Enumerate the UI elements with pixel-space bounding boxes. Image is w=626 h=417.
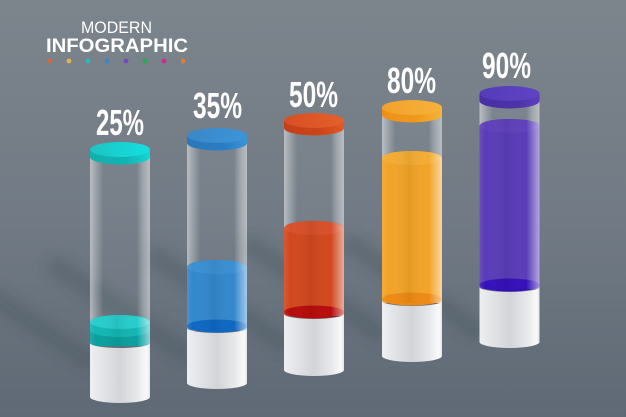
- label: 80%: 80%: [387, 60, 436, 101]
- glass tube: [187, 141, 247, 331]
- label: 50%: 50%: [289, 74, 338, 115]
- cylinder: 25% teal: [90, 142, 150, 403]
- white base: [382, 301, 442, 362]
- white base: [90, 343, 150, 403]
- cylinder: 35% blue: [187, 128, 247, 389]
- cylinder: 80% orange: [382, 100, 442, 362]
- liquid: [480, 119, 540, 292]
- glass tube: [480, 99, 540, 289]
- glass tube: [382, 113, 442, 303]
- glass tube: [284, 126, 344, 316]
- title: [46, 19, 188, 63]
- liquid: [382, 151, 442, 306]
- cap: [90, 142, 150, 164]
- title line: modern: MODERN: [81, 19, 152, 37]
- cap: [382, 100, 442, 123]
- title line: infographic: INFOGRAPHIC: [46, 36, 188, 57]
- liquid: [90, 315, 150, 346]
- cap: [187, 128, 247, 150]
- white base: [480, 287, 540, 348]
- liquid: [284, 221, 344, 318]
- label: 90%: 90%: [482, 45, 531, 86]
- cap: [480, 86, 540, 108]
- white base: [284, 314, 344, 376]
- diagonal cast shadows: [0, 240, 483, 365]
- white base: [187, 328, 247, 389]
- label: 25%: 25%: [96, 102, 144, 143]
- liquid: [187, 260, 247, 332]
- cylinder: 90% purple: [480, 86, 540, 348]
- label: 35%: 35%: [193, 85, 242, 126]
- glass tube: [90, 155, 150, 345]
- cap: [284, 113, 344, 136]
- colored dots row: [48, 59, 185, 63]
- cylinder: 50% red: [284, 113, 344, 376]
